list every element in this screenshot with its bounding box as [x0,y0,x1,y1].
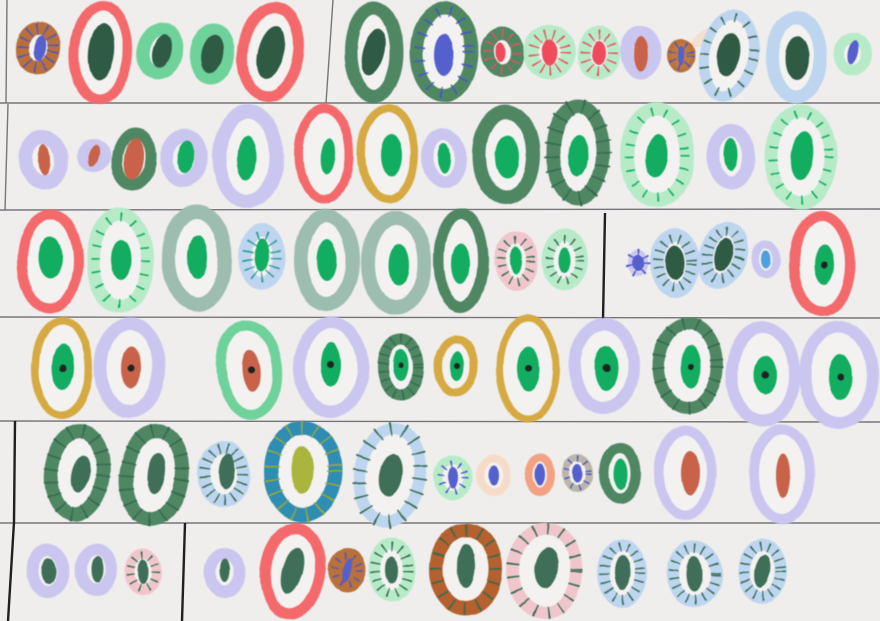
eye: mint, dark pupil 2 [194,28,230,80]
eye: gold thin ring [500,318,556,418]
eye: small lavender, blue pupil [755,244,777,274]
eye: lavender star blue [630,252,646,274]
eye: lavender, terracotta pupil [627,33,655,73]
eye: brown ring ticked [436,530,496,608]
eye: lavender ring, green dot 3 [732,327,794,421]
eye: light blue ticked [204,447,244,501]
eye: dark green, green pupil [604,447,636,499]
eye: mint, blue ticks [438,459,468,495]
eye: coral ring, dark pupil [72,4,130,100]
eye: pink ring ticked [513,529,577,613]
smudge: orange wash [689,23,723,51]
eye: blue ticked 3 [744,544,782,598]
eye: mint, dark pupil [140,26,180,76]
eye: lavender, dark 1 [32,550,64,592]
eye: light blue ring [772,17,820,97]
row 6 of eyes [32,525,782,617]
eye: dark green ticked [552,106,604,198]
eye: dark green ring [351,8,397,96]
eye: mint ring, terracotta dot [217,323,281,417]
eye: small brown, blue pupil [669,41,693,71]
row 4 of eyes [35,318,873,423]
row 1 of eyes [19,4,867,100]
eye: lavender ring, green dot 4 [805,327,873,423]
eye: light blue ticked big [354,424,426,526]
eye: peach, blue [480,458,506,492]
eye: brown, blue ticks [330,550,364,590]
eye: coral ring, green with dot [794,216,850,312]
eye: blue ticked dark 2 [700,225,746,285]
eye: pink ticked [500,237,532,285]
eye: coral ring, dark [260,525,326,617]
eye: pink ticked [130,553,156,591]
eye: mint, red pupil [530,32,568,72]
eye: lavender, terracotta dot [101,324,159,412]
eye: mint ticked dark [375,544,409,596]
eye: lavender, dark 3 [210,554,240,592]
eye: lavender, dark 2 [81,550,111,590]
eye: lavender ring, terracotta 1 [659,431,711,515]
eye: dark green ticked 2 [120,428,188,522]
eye: coral ring, green [22,214,78,308]
eye: mint ticked small [548,235,582,285]
eye: mint, small blue pupil [839,38,867,70]
eye: gold ring, green [361,108,415,200]
row 2 of eyes [25,106,831,203]
eye: lavender, terracotta [25,137,61,183]
eye: dark green ticked, dot [659,324,717,408]
eye: dark green, terracotta [115,132,153,186]
eye: lavender ring, terracotta 2 [754,429,810,519]
eye: lavender, green small [428,134,460,182]
eye: dark green ring, green [479,112,533,198]
eye: big lavender ring [219,112,277,202]
eye: blue ticked 2 [672,547,716,601]
eye: dark green ticked small [383,339,419,395]
eye: grey, blue ticks [566,458,590,488]
eye: teal ring, olive pupil [271,427,335,515]
row 5 of eyes [47,424,810,526]
eye: mint ticked [627,109,687,201]
eye: sage ring 3 [368,218,424,308]
row 3 of eyes [22,211,850,312]
eye: gold ring, dot [35,321,89,415]
eye: dark green ring, blue ticks [416,8,472,96]
eye: dark green narrow ring [439,213,483,307]
eye: small lavender [79,142,109,170]
eye: lavender ring, green dot 2 [574,324,634,408]
eye: sage ring 2 [301,216,353,304]
eye: orange, blue [529,459,551,491]
eye: mint ticked 2 [771,111,831,203]
eye: mint, red pupil 2 [584,33,614,73]
eye: coral ring, dark pupil 2 [237,4,305,100]
eye: lavender ring, green dot 1 [299,323,363,411]
eye: brown with blue pupil [19,26,57,70]
eye: green, red pupil [487,33,517,71]
eye: gold small [438,339,474,393]
eye: sage ring 1 [169,211,225,305]
eye: blue ticked dark 1 [657,235,693,291]
eye: light blue, teal ticks [245,231,279,283]
eye: dark green ticked 1 [47,429,107,517]
eye: mint ticked [93,214,147,306]
eye: coral ring, green [299,109,349,199]
eye: lavender, green [163,132,205,184]
eye: light blue with ticks [697,10,761,100]
eye: blue ticked 1 [603,545,641,601]
eye: lavender, green 3 [713,131,749,183]
